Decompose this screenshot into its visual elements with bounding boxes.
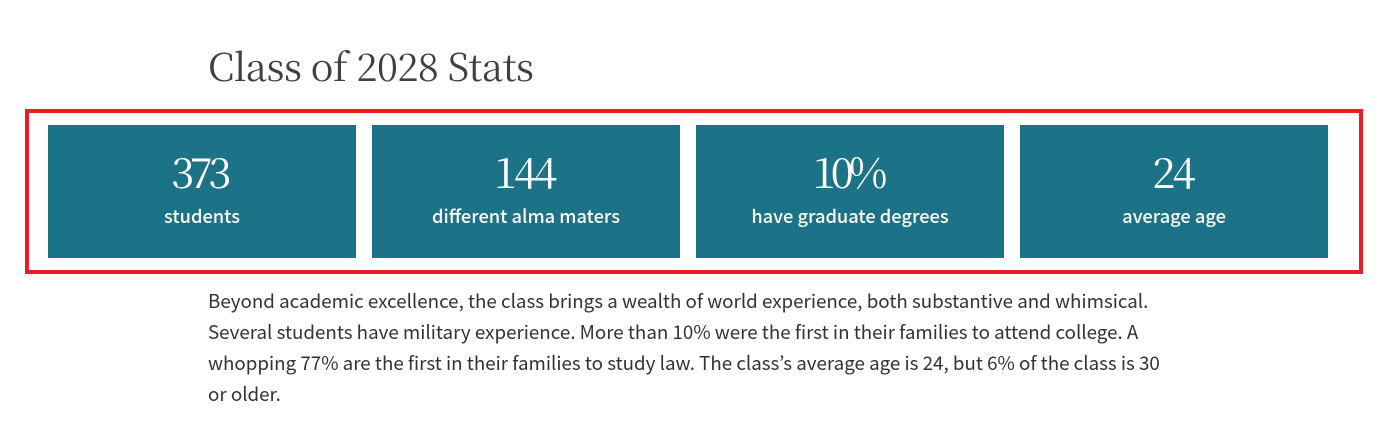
stat number: 24 xyxy=(1152,141,1193,201)
body paragraph xyxy=(208,287,1160,407)
stat card: graduate degrees xyxy=(696,125,1004,258)
stat label: students xyxy=(164,203,240,229)
stat label: average age xyxy=(1122,203,1226,229)
body paragraph: whopping 77% are the first in their families to study law. The class’s average age is 24, but 6% of the class is 30 xyxy=(208,349,1160,376)
stat label: have graduate degrees xyxy=(751,203,949,229)
stat card: average age xyxy=(1020,125,1328,258)
body paragraph: Beyond academic excellence, the class brings a wealth of world experience, both substantive and whimsical. xyxy=(208,287,1148,314)
stat card: students xyxy=(48,125,356,258)
red highlight frame xyxy=(25,109,1363,274)
stat card: alma maters xyxy=(372,125,680,258)
stat number: 144 xyxy=(494,141,554,201)
body paragraph: or older. xyxy=(208,380,281,407)
stat number: 10% xyxy=(813,141,882,201)
body paragraph: Several students have military experience. More than 10% were the first in their families to attend college. A xyxy=(208,318,1138,345)
stat number: 373 xyxy=(171,141,227,201)
title: Class of 2028 Stats xyxy=(208,37,534,92)
stat label: different alma maters xyxy=(432,203,620,229)
